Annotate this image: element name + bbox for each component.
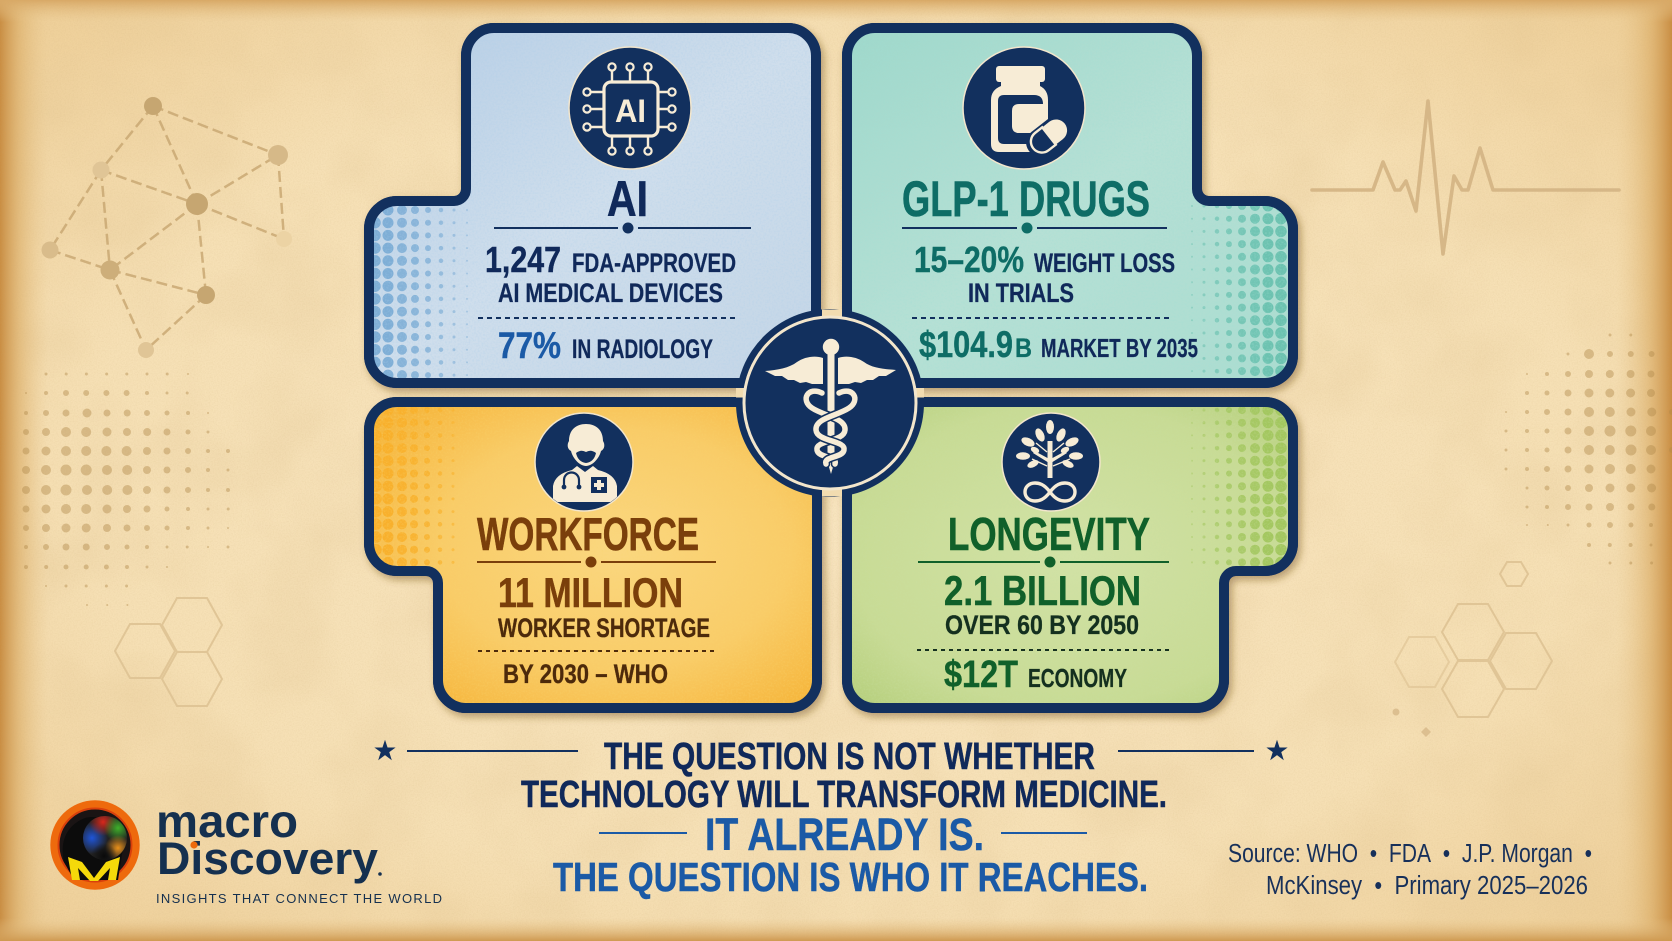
stat: 1,247 FDA-approved: 1,247 <box>485 239 561 280</box>
decorative hexagons left <box>115 598 222 706</box>
stat: $12T economy <box>944 654 1127 696</box>
icon: pill bottle <box>963 47 1085 169</box>
panel: AI <box>369 28 816 383</box>
decorative halftone left <box>26 374 229 605</box>
star and rule right <box>1118 740 1288 760</box>
decorative molecule network <box>42 97 292 358</box>
source note: Source: WHO • FDA • J.P. Morgan • <box>1228 840 1592 868</box>
decorative halftone right <box>1506 335 1672 563</box>
decorative ECG line <box>1312 101 1619 254</box>
heading: longevity: LONGEVITY <box>948 508 1150 560</box>
stat: 11 million: 11 MILLION <box>498 569 683 616</box>
stat: 77% in radiology <box>498 325 713 366</box>
text: worker shortage: WORKER SHORTAGE <box>498 613 710 643</box>
stat: 15–20% weight loss <box>914 239 1175 280</box>
stat: 77% in radiology: IN RADIOLOGY <box>572 334 713 364</box>
text: AI medical devices: AI MEDICAL DEVICES <box>498 278 723 308</box>
stat: 2.1 billion: 2.1 BILLION <box>944 567 1141 614</box>
closing statement <box>374 736 1288 900</box>
icon: tree with infinity <box>1002 413 1100 511</box>
statement line 3 with rules: IT ALREADY IS. <box>705 809 984 860</box>
caduceus snakes <box>806 391 855 464</box>
caduceus wings <box>765 357 896 384</box>
star and rule left <box>374 740 578 760</box>
stat: 1,247 FDA-approved: FDA-APPROVED <box>572 248 736 278</box>
stat: $104.9B market by 2035: MARKET BY 2035 <box>1041 333 1198 363</box>
stat: $104.9B market by 2035 <box>919 324 1198 365</box>
logo mark <box>50 800 140 890</box>
statement line 2: TECHNOLOGY WILL TRANSFORM MEDICINE. <box>521 774 1167 816</box>
logo tagline: INSIGHTS THAT CONNECT THE WORLD <box>156 891 442 906</box>
caduceus staff <box>823 339 839 474</box>
logo wordmark <box>156 795 382 884</box>
icon: doctor <box>535 413 633 511</box>
heading divider <box>477 556 716 568</box>
icon: AI chip: AI <box>615 93 646 129</box>
heading: AI: AI <box>607 171 648 227</box>
icon: AI chip <box>569 47 691 169</box>
panel: workforce <box>369 402 817 708</box>
stat: $104.9B market by 2035: B <box>1015 333 1032 363</box>
stat: 1,247 FDA-approved <box>485 239 736 280</box>
dotted divider <box>478 650 717 652</box>
decorative hexagons right <box>1392 562 1552 737</box>
heading: GLP-1 drugs: GLP-1 DRUGS <box>902 171 1150 227</box>
heading divider <box>902 222 1167 234</box>
dashed divider <box>912 317 1172 319</box>
text: by 2030 WHO: BY 2030 – WHO <box>503 659 668 689</box>
center badge: caduceus <box>736 309 924 497</box>
heading divider <box>918 556 1169 568</box>
dotted divider <box>917 649 1171 651</box>
statement line 4: THE QUESTION IS WHO IT REACHES. <box>553 854 1148 900</box>
stat: $12T economy: ECONOMY <box>1028 663 1127 693</box>
stat: $104.9B market by 2035: $104.9 <box>919 324 1013 365</box>
heading: workforce: WORKFORCE <box>477 508 699 560</box>
logo wordmark: macro <box>156 795 298 847</box>
stat: 77% in radiology: 77% <box>498 325 561 366</box>
stat: 15–20% weight loss: 15–20% <box>914 239 1024 280</box>
logo wordmark: Discovery <box>157 833 378 884</box>
source note <box>1228 840 1592 900</box>
icon: capsule <box>1021 110 1077 162</box>
text: in trials: IN TRIALS <box>968 278 1074 308</box>
panel: GLP-1 drugs <box>847 28 1293 383</box>
stat: 15–20% weight loss: WEIGHT LOSS <box>1034 248 1175 278</box>
statement line 1: THE QUESTION IS NOT WHETHER <box>604 736 1095 778</box>
source note: McKinsey • Primary 2025–2026 <box>1266 872 1588 900</box>
stat: $12T economy: $12T <box>944 654 1018 696</box>
text: over 60 by 2050: OVER 60 BY 2050 <box>945 610 1139 640</box>
dashed divider <box>478 317 735 319</box>
logo: macro Discovery <box>50 795 442 906</box>
heading divider <box>494 222 751 234</box>
panel: longevity <box>847 402 1293 708</box>
